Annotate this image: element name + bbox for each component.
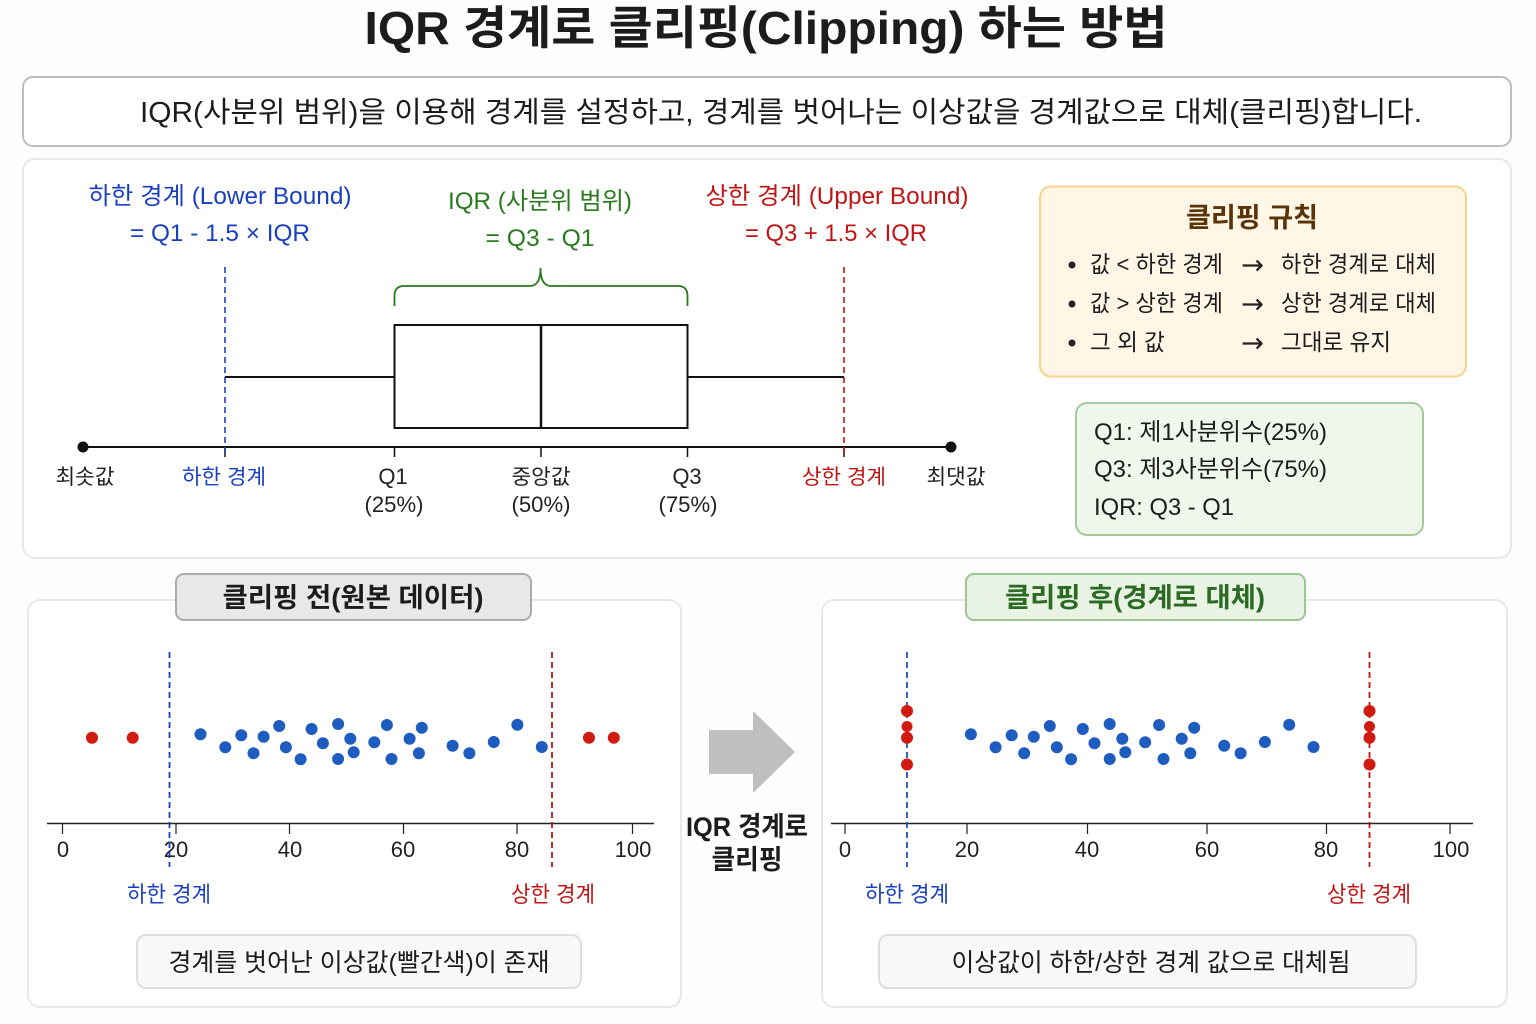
axis: 100 [615,837,651,862]
clipped points at lower bound [901,705,913,770]
rule 2: 값 > 상한 경계 [1090,290,1223,316]
panel: definitions: Q3: 제3사분위수(75%) [1094,456,1327,483]
arrow: before to after: 클리핑 [712,845,782,875]
axis: 0 [57,837,69,862]
rule 1: → [1241,250,1264,281]
IQR formula: = Q3 - Q1 [486,225,594,252]
panel: definitions: Q1: 제1사분위수(25%) [1094,419,1327,446]
axis: 60 [391,837,415,862]
rule 1: 하한 경계로 대체 [1281,251,1436,277]
panel: clipping rules [1040,186,1466,376]
upper bound label: 상한 경계 [511,882,595,907]
arrow: before to after [686,711,808,875]
IQR bracket [394,268,688,306]
normal points [194,718,548,765]
number line labels [56,464,986,517]
axis [831,824,1473,862]
upper bound line [1368,652,1370,867]
rule 3: → [1241,328,1264,359]
axis: 60 [1195,837,1219,862]
lower bound line [168,652,170,867]
upper bound formula: = Q3 + 1.5 × IQR [745,220,927,247]
number line labels: Q3 [672,464,702,489]
header: after clipping: 클리핑 후(경계로 대체) [1005,583,1265,613]
number line labels: 중앙값 [512,466,570,489]
upper bound dashed line [843,267,845,457]
axis: 40 [1075,837,1099,862]
number line labels: 상한 경계 [802,466,886,489]
subtitle box: IQR(사분위 범위)을 이용해 경계를 설정하고, 경계를 벗어나는 이상값을 경계값으로 대체(클리핑)합니다. [140,96,1422,129]
number line labels: (50%) [512,492,570,517]
IQR formula [448,188,632,252]
title: IQR 경계로 클리핑(Clipping) 하는 방법 [364,2,1168,54]
number line labels: 하한 경계 [182,466,266,489]
lower bound formula: 하한 경계 (Lower Bound) [88,183,352,210]
callout: before [137,935,581,988]
panel: box plot explanation [23,159,1511,558]
axis: 80 [1314,837,1338,862]
callout: before: 경계를 벗어난 이상값(빨간색)이 존재 [168,949,550,977]
axis: 0 [839,837,851,862]
arrow: before to after: IQR 경계로 [686,812,808,842]
rule 3: 그 외 값 [1090,329,1165,355]
number line labels: Q1 [378,464,408,489]
rule 3: 그대로 유지 [1281,329,1391,355]
outlier points [86,732,620,744]
panel: after clipping [822,574,1507,1007]
upper bound label: 상한 경계 [1327,882,1411,907]
subtitle box [23,77,1511,146]
lower bound line [906,652,908,867]
rule 2: → [1241,289,1264,320]
normal points [965,718,1320,765]
axis: 40 [278,837,302,862]
upper bound line [551,652,553,867]
lower bound label: 하한 경계 [865,882,949,907]
upper bound formula [706,183,968,247]
axis [47,824,654,862]
header: before clipping: 클리핑 전(원본 데이터) [222,583,484,613]
callout: after: 이상값이 하한/상한 경계 값으로 대체됨 [952,949,1350,977]
rule 2 [1068,289,1436,320]
panel: definitions: IQR: Q3 - Q1 [1094,494,1234,521]
upper bound formula: 상한 경계 (Upper Bound) [706,183,968,210]
rule 3 [1068,328,1391,359]
box plot [225,325,844,428]
lower bound dashed line [224,267,226,457]
rule 2: 상한 경계로 대체 [1281,290,1436,316]
lower bound formula: = Q1 - 1.5 × IQR [130,220,310,247]
axis: 80 [505,837,529,862]
IQR formula: IQR (사분위 범위) [448,188,632,215]
axis: 100 [1433,837,1469,862]
panel: definitions [1076,403,1423,535]
panel: clipping rules: 클리핑 규칙 [1186,203,1318,233]
header: before clipping [176,574,531,620]
lower bound formula [88,183,352,247]
number line labels: (25%) [364,492,424,517]
axis: 20 [164,837,188,862]
header: after clipping [966,574,1305,620]
number line labels: 최댓값 [926,466,986,489]
axis: 20 [955,837,979,862]
rule 1 [1068,250,1436,281]
number line [78,442,956,457]
number line labels: 최솟값 [56,466,114,489]
number line labels: (75%) [658,492,718,517]
lower bound label: 하한 경계 [127,882,211,907]
panel: before clipping [28,574,681,1007]
clipped points at upper bound [1364,705,1376,770]
rule 1: 값 < 하한 경계 [1090,251,1223,277]
callout: after [879,935,1416,988]
